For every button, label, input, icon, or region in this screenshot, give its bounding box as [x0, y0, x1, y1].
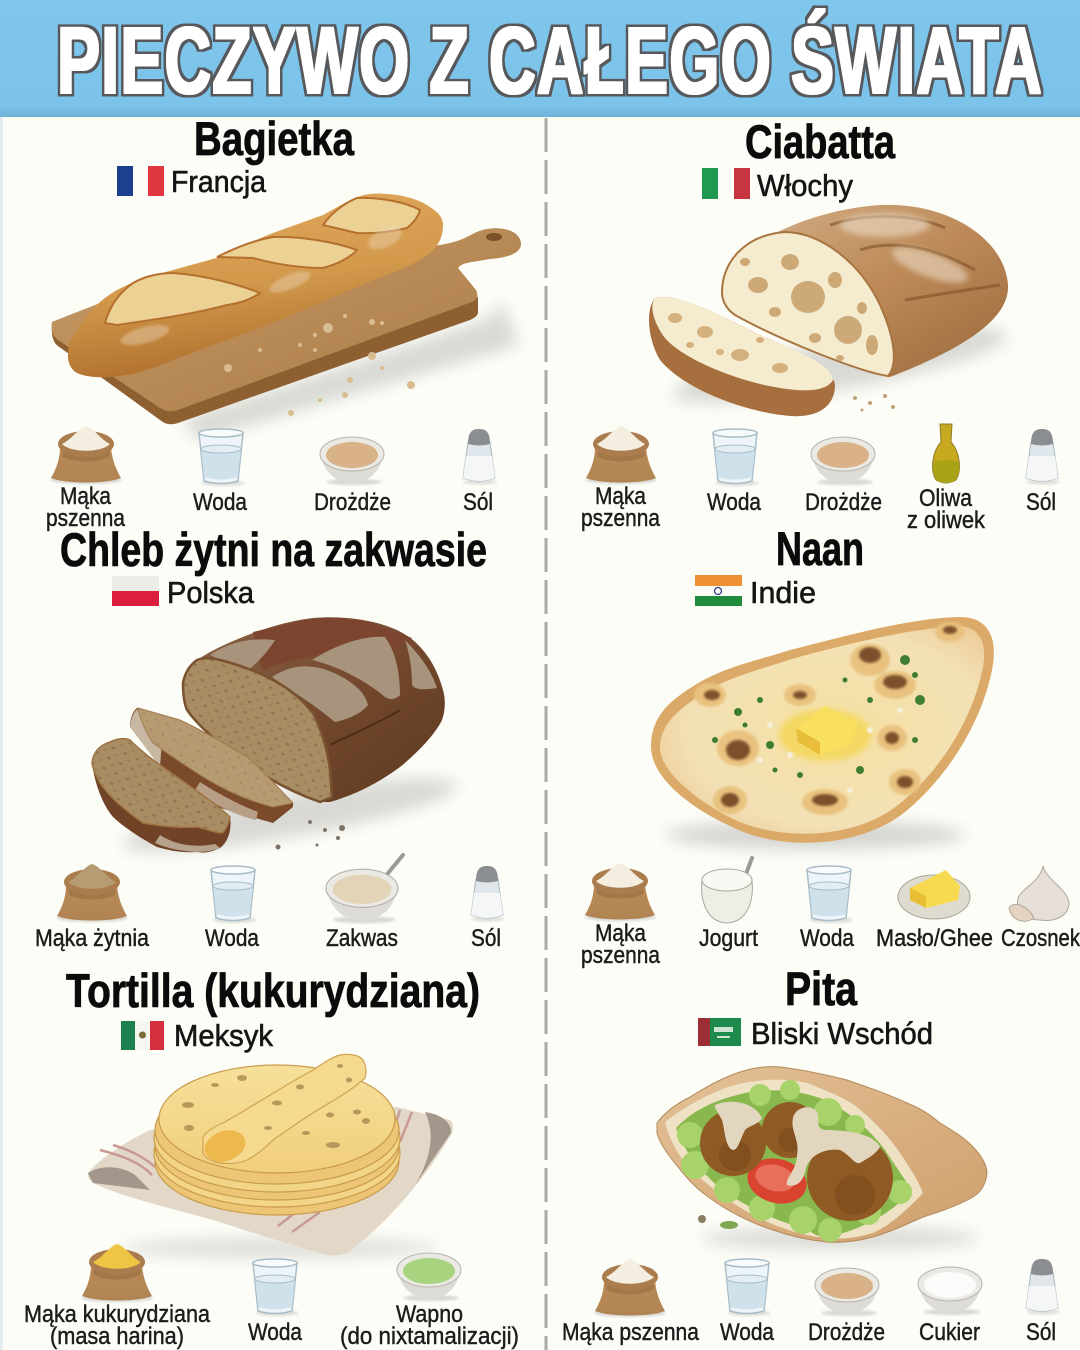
- flag: Mexico: [121, 1021, 164, 1050]
- ingredient: corn flour: Mąka kukurydziana: [24, 1301, 210, 1328]
- illustration: naan with butter and herbs: [651, 617, 994, 849]
- ingredient: sugar: [918, 1267, 982, 1346]
- panel: Ciabatta: [581, 115, 1060, 534]
- heading: Naan: [776, 522, 864, 575]
- country label: Polska: [167, 575, 255, 610]
- illustration: pita with falafel: [657, 1067, 987, 1250]
- ingredient: water: Woda: [205, 925, 259, 952]
- panel: Chleb żytni: [35, 523, 505, 952]
- ingredient: wheat flour: pszenna: [46, 505, 125, 532]
- panel: Bagietka: [46, 112, 521, 532]
- ingredient: water: [205, 866, 259, 952]
- heading: Ciabatta: [745, 115, 896, 168]
- ingredient: rye flour: Mąka żytnia: [35, 925, 149, 952]
- ingredient: yeast: Drożdże: [805, 489, 882, 516]
- ingredient: wheat flour: Mąka: [60, 483, 111, 510]
- heading: Tortilla (kukurydziana): [66, 964, 480, 1017]
- ingredient: water: Woda: [800, 925, 854, 952]
- ingredient: yeast: Drożdże: [314, 489, 391, 516]
- ingredient: wheat flour: Mąka: [595, 920, 646, 947]
- ingredient: lime: [340, 1253, 519, 1350]
- country label: Meksyk: [174, 1018, 273, 1053]
- ingredient: butter or ghee: [876, 870, 993, 952]
- country label: Indie: [750, 575, 816, 610]
- ingredient: salt: [471, 866, 505, 952]
- ingredient: wheat flour: [562, 1259, 699, 1346]
- illustration: baguette on cutting board: [52, 194, 521, 440]
- ingredient: corn flour: [24, 1244, 210, 1350]
- ingredient: yeast: [314, 437, 391, 516]
- ingredient: olive oil: [907, 424, 986, 534]
- ingredient: yeast: [805, 437, 882, 516]
- heading: Chleb żytni na zakwasie: [60, 523, 487, 576]
- ingredient: yeast: [808, 1268, 885, 1346]
- flag: France: [117, 166, 164, 196]
- ingredient: butter or ghee: Masło/Ghee: [876, 925, 993, 952]
- ingredient: lime: (do nixtamalizacji): [340, 1323, 519, 1350]
- flag: Italy: [702, 168, 750, 199]
- country label: Włochy: [757, 168, 853, 203]
- ingredient: salt: [1026, 1259, 1060, 1346]
- ingredient: sourdough starter: Zakwas: [326, 925, 398, 952]
- ingredient: wheat flour: pszenna: [581, 942, 660, 969]
- ingredient: corn flour: (masa harina): [50, 1323, 184, 1350]
- ingredient: wheat flour: Mąka: [595, 483, 646, 510]
- ingredient: water: Woda: [720, 1319, 774, 1346]
- ingredient: water: [707, 429, 761, 516]
- ingredient: wheat flour: Mąka pszenna: [562, 1319, 699, 1346]
- ingredient: water: [720, 1259, 774, 1346]
- heading: Bagietka: [194, 112, 355, 165]
- ingredient: garlic: [1001, 866, 1080, 952]
- ingredient: water: [193, 429, 247, 516]
- ingredient: salt: Sól: [1026, 1319, 1056, 1346]
- ingredient: water: Woda: [193, 489, 247, 516]
- ingredient: sugar: Cukier: [919, 1319, 980, 1346]
- country label: Francja: [171, 164, 267, 199]
- ingredient: sourdough starter: [326, 855, 403, 952]
- flag: India: [695, 575, 742, 606]
- ingredient: wheat flour: pszenna: [581, 505, 660, 532]
- ingredient: salt: [1026, 429, 1060, 516]
- ingredient: wheat flour: [581, 863, 660, 969]
- flag: Poland: [112, 576, 159, 606]
- ingredient: water: Woda: [707, 489, 761, 516]
- ingredient: salt: Sól: [471, 925, 501, 952]
- ingredient: salt: Sól: [463, 489, 493, 516]
- ingredient: water: [248, 1259, 302, 1346]
- ingredient: olive oil: z oliwek: [907, 507, 986, 534]
- ingredient: water: Woda: [248, 1319, 302, 1346]
- ingredient: wheat flour: [581, 426, 660, 532]
- title: PIECZYWO Z CAŁEGO ŚWIATA: [57, 8, 1042, 114]
- ingredient: wheat flour: [46, 426, 125, 532]
- illustration: sourdough rye loaf with slices: [92, 617, 461, 866]
- header banner: [0, 0, 1080, 117]
- ingredient: olive oil: Oliwa: [919, 485, 972, 512]
- ingredient: rye flour: [35, 864, 149, 952]
- ingredient: salt: [463, 429, 497, 516]
- ingredient: yogurt: [699, 858, 758, 952]
- country label: Bliski Wschód: [751, 1016, 933, 1051]
- ingredient: yeast: Drożdże: [808, 1319, 885, 1346]
- ingredient: salt: Sól: [1026, 489, 1056, 516]
- heading: Pita: [785, 962, 858, 1015]
- illustration: ciabatta loaf and slice: [649, 205, 1012, 418]
- flag: Middle East: [698, 1018, 741, 1046]
- panel: Tortilla: [24, 964, 519, 1350]
- ingredient: water: [800, 866, 854, 952]
- ingredient: yogurt: Jogurt: [699, 925, 758, 952]
- illustration: stack of tortillas on cloth: [88, 1054, 453, 1258]
- panel: Naan: [581, 522, 1080, 969]
- ingredient: lime: Wapno: [396, 1301, 463, 1328]
- panel: Pita: [562, 962, 1060, 1346]
